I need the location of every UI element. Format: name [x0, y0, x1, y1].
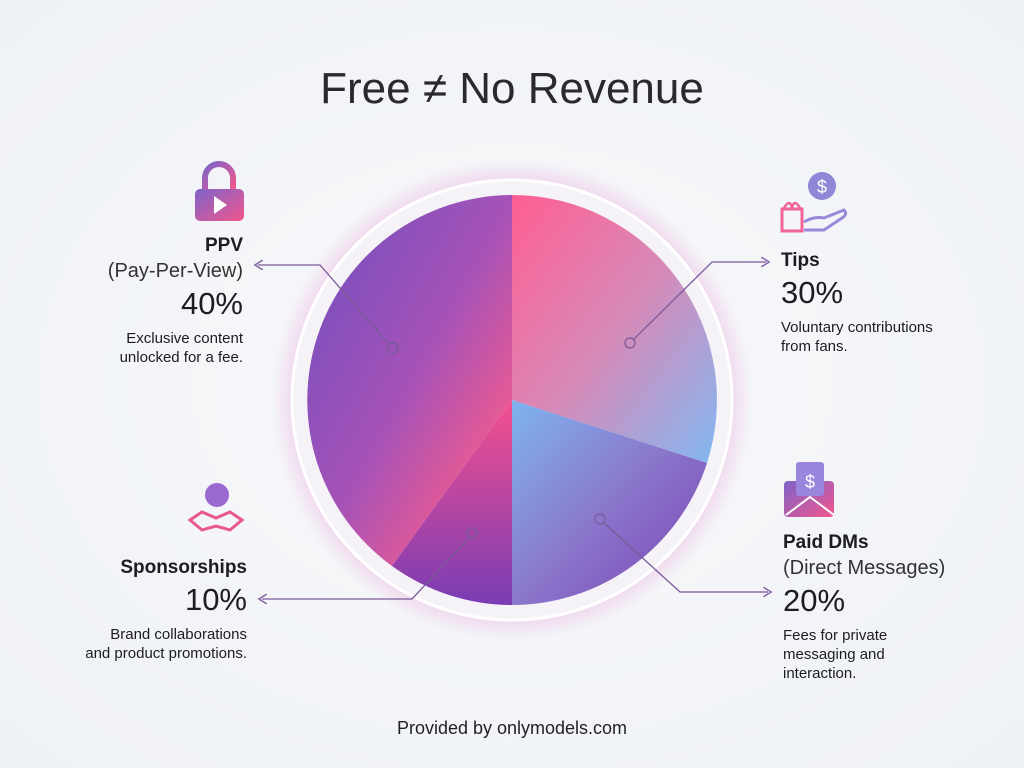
text: PPV: PPV [205, 235, 243, 256]
title: Free ≠ No Revenue [320, 64, 704, 113]
text: PPV: unlocked for a fee. [120, 349, 243, 366]
text: Tips: 30% [781, 275, 843, 310]
leader: Tips [625, 262, 766, 348]
slice: PPV [307, 195, 512, 566]
text: Tips [781, 250, 933, 355]
slice: Paid DMs [512, 400, 707, 605]
leader: PPV [258, 265, 398, 353]
text: PPV: (Pay-Per-View) [108, 260, 243, 282]
icon: envelope [784, 462, 834, 517]
text: Paid DMs: Paid DMs [783, 532, 869, 553]
text: Paid DMs: Fees for private [783, 627, 887, 644]
text: Tips: Tips [781, 250, 820, 271]
icon: envelope: $ [805, 472, 815, 492]
text: Paid DMs: interaction. [783, 665, 856, 682]
text: Sponsorships: Brand collaborations [110, 626, 247, 643]
text: Sponsorships [85, 557, 247, 662]
icon: lock [195, 164, 244, 221]
leader: Sponsorships [262, 528, 477, 599]
slice: Sponsorships [392, 400, 512, 605]
text: Sponsorships: 10% [185, 582, 247, 617]
text: Paid DMs [783, 532, 945, 682]
text: PPV [108, 235, 243, 366]
text: Paid DMs: messaging and [783, 646, 885, 663]
text: Paid DMs: 20% [783, 583, 845, 618]
icon: gift hand: $ [817, 177, 827, 197]
text: PPV: 40% [181, 286, 243, 321]
text: Paid DMs: (Direct Messages) [783, 557, 945, 579]
footer: Provided by onlymodels.com [397, 718, 627, 738]
leader: Paid DMs [595, 514, 768, 592]
text: Sponsorships: Sponsorships [120, 557, 247, 578]
slice: Tips [512, 195, 717, 463]
icon: handshake [190, 483, 242, 530]
text: PPV: Exclusive content [126, 330, 243, 347]
text: Sponsorships: and product promotions. [85, 645, 247, 662]
icon: gift hand [782, 172, 846, 231]
text: Tips: Voluntary contributions [781, 319, 933, 336]
text: Tips: from fans. [781, 338, 848, 355]
